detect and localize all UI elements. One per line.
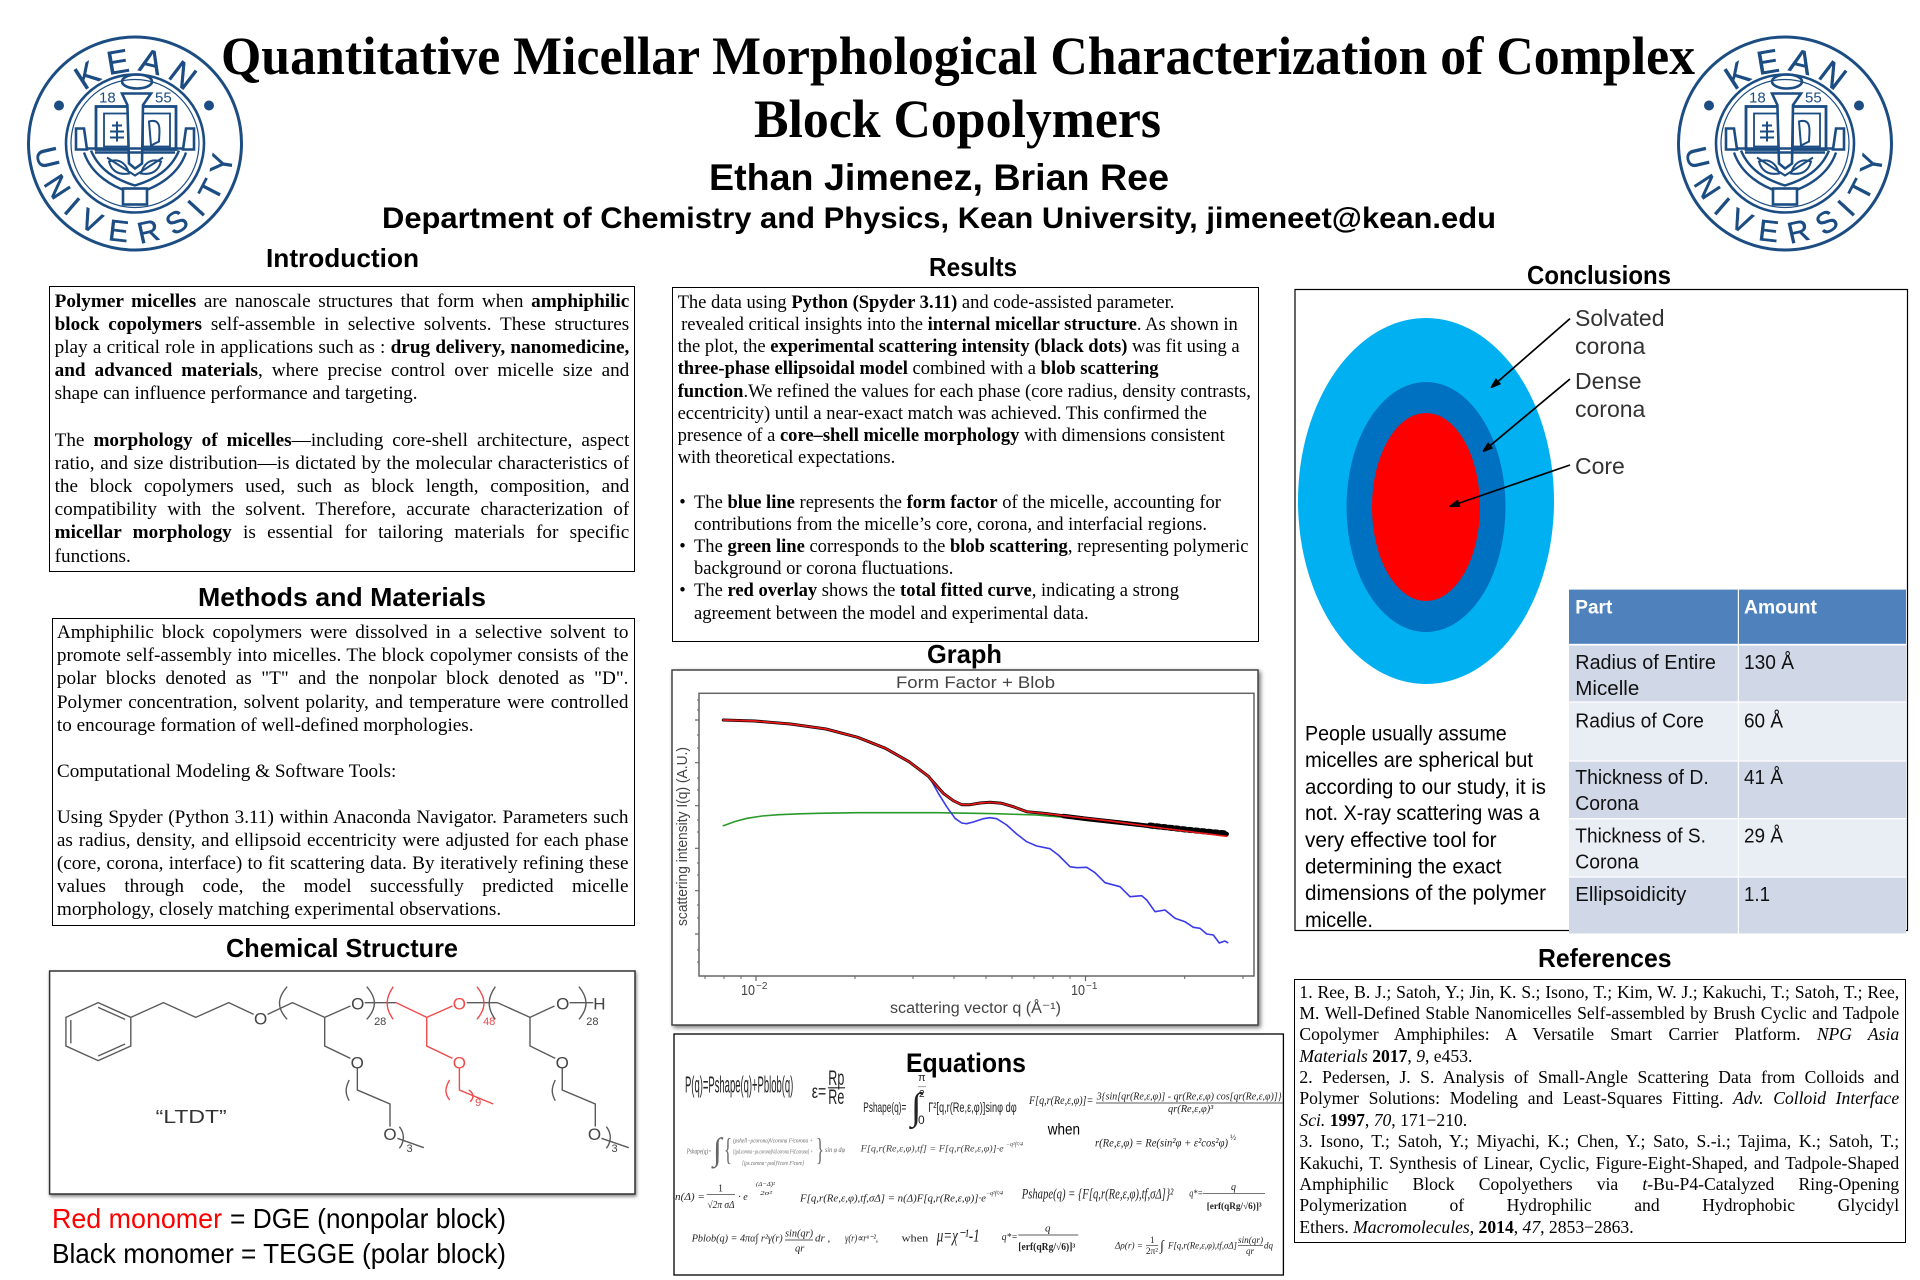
heading: Graph: Graph bbox=[927, 639, 1002, 669]
panel: methods and materials text: values through code, the model successfully predicted micelle bbox=[57, 876, 628, 897]
panel: references text: Polymer Solutions: Modeling and Least-Squares Fitting. Adv. Colloid Interface bbox=[1299, 1088, 1899, 1108]
equation row 3: 1 bbox=[718, 1184, 723, 1195]
panel: methods and materials text: as radius, density, and ellipsoid eccentricity were adjusted for each phase bbox=[57, 830, 628, 851]
labels: atoms and subscripts: O bbox=[556, 994, 569, 1014]
labels: micelle regions: corona bbox=[1575, 333, 1646, 359]
panel: chemical structure bbox=[50, 971, 635, 1194]
labels: atoms and subscripts: 28 bbox=[586, 1016, 599, 1028]
table: micelle dimensions: Ellipsoidicity bbox=[1575, 884, 1686, 906]
labels: atoms and subscripts: 28 bbox=[374, 1016, 386, 1028]
equation row 2: [(ρs.corona−ρsol)Vcore F²core] bbox=[742, 1160, 804, 1167]
labels: atoms and subscripts: O bbox=[588, 1125, 601, 1144]
equation row 2: [(ρd.corona−ρs.corona)Vd.corona F²d.corona] + bbox=[733, 1148, 813, 1155]
equation row 2: } bbox=[816, 1131, 824, 1167]
equation row 3: −q²f²/4 bbox=[986, 1190, 1003, 1197]
panel: results text: agreement between the model and experimental data. bbox=[694, 603, 1089, 624]
panel: results text: eccentricity) until a near-exact match was achieved. This confirmed the bbox=[678, 403, 1207, 424]
equation row 4: Δρ(r) = bbox=[1114, 1240, 1143, 1250]
panel: references text: 1. Ree, B. J.; Satoh, Y.; Jin, K. S.; Isono, T.; Kim, W. J.; Kakuchi, T.; Satoh, T.; Ree, bbox=[1299, 982, 1899, 1002]
panel: introduction text: block copolymers self-assemble in selective solvents. These structures bbox=[55, 314, 629, 335]
equation row 3: √2π σΔ bbox=[708, 1200, 735, 1211]
equation row 1: Re bbox=[828, 1086, 844, 1109]
panel: methods and materials text: promote self-assembly into micelles. The block copolymer consists of the bbox=[57, 645, 628, 666]
equation row 1: Pshape(q)= bbox=[863, 1099, 906, 1115]
panel: equations bbox=[674, 1034, 1283, 1275]
diagram: polymer skeleton bbox=[66, 987, 629, 1148]
labels: atoms and subscripts: O bbox=[453, 1054, 466, 1072]
axis labels: −2 bbox=[756, 981, 768, 992]
labels: atoms and subscripts: O bbox=[351, 994, 364, 1014]
equation row 1: when bbox=[1047, 1121, 1080, 1138]
equation row 2 continued: F[q,r(Re,ε,φ),tf] = F[q,r(Re,ε,φ)]·e bbox=[860, 1144, 1004, 1154]
text: conclusion paragraph: dimensions of the polymer bbox=[1305, 882, 1546, 905]
authors: Ethan Jimenez, Brian Ree bbox=[709, 157, 1169, 198]
legend: monomer colours: = DGE (nonpolar block) bbox=[230, 1203, 506, 1234]
panel: introduction text: ratio, and size distribution—is dictated by the molecular characteristics of bbox=[55, 453, 629, 474]
panel: methods and materials text: Amphiphilic block copolymers were dissolved in a selective solvent to bbox=[57, 622, 628, 643]
panel: references text: Amphiphilic Block Copolyethers via t-Bu-P4-Catalyzed Ring-Opening bbox=[1299, 1174, 1899, 1194]
axis labels bbox=[674, 747, 1098, 1017]
heading: Conclusions: Conclusions bbox=[1527, 260, 1671, 290]
equation row 2 continued bbox=[860, 1141, 1023, 1154]
legend: monomer colours bbox=[52, 1203, 506, 1269]
heading: Methods and Materials: Methods and Materials bbox=[198, 582, 486, 612]
legend: monomer colours: Black monomer = TEGGE (polar block) bbox=[52, 1238, 506, 1269]
table: micelle dimensions: 60 Å bbox=[1744, 710, 1784, 732]
labels: micelle regions: Solvated bbox=[1575, 305, 1665, 331]
panel: methods and materials text: to encourage formation of well-defined morphologies. bbox=[57, 715, 474, 736]
labels: micelle regions bbox=[1575, 305, 1665, 479]
equation row 1: r(Re,ε,φ) = Re(sin²φ + ε²cos²φ) bbox=[1095, 1136, 1228, 1150]
panel: introduction text: the block copolymers used, such as block length, composition, and bbox=[55, 476, 629, 497]
panel: references text: Materials 2017, 9, e453. bbox=[1299, 1046, 1472, 1066]
equation row 1: ε= bbox=[812, 1082, 826, 1103]
equation row 3: q*= bbox=[1189, 1189, 1203, 1200]
equation row 4: Pblob(q) = 4πα∫ r²γ(r) bbox=[691, 1233, 783, 1245]
panel: introduction text: and advanced materials, where precise control over micelle size and bbox=[55, 360, 629, 381]
equation row 1: Rp bbox=[828, 1067, 844, 1090]
logo: Kean University seal right: 55 bbox=[1805, 90, 1822, 106]
panel: results text: The blue line represents the form factor of the micelle, accounting for bbox=[694, 492, 1221, 513]
equation row 4: dr , bbox=[815, 1233, 831, 1245]
axis labels: scattering vector q (Å⁻¹) bbox=[890, 1000, 1061, 1017]
table: micelle dimensions: 1.1 bbox=[1744, 884, 1770, 906]
equation row 4: dq bbox=[1264, 1240, 1274, 1250]
heading: Results: Results bbox=[929, 252, 1017, 282]
panel: results text: the plot, the experimental scattering intensity (black dots) was fit using a bbox=[678, 336, 1240, 357]
equation row 3 bbox=[675, 1181, 1265, 1212]
equation row 2: ∫ bbox=[711, 1131, 724, 1169]
panel: introduction text: The morphology of micelles—including core-shell architecture, aspect bbox=[55, 430, 629, 451]
equation row 1: P(q)=Pshape(q)+Pblob(q) bbox=[685, 1071, 793, 1097]
panel: introduction text: functions. bbox=[55, 546, 131, 567]
labels: atoms and subscripts: O bbox=[453, 994, 466, 1014]
label: LTDT: “LTDT” bbox=[156, 1107, 227, 1127]
panel: methods and materials text: morphology, closely matching experimental observations. bbox=[57, 899, 501, 920]
panel: references text: Copolymer Amphiphiles: A Versatile Smart Carrier Platform. NPG Asia bbox=[1299, 1024, 1899, 1044]
logo: Kean University seal left: 18 bbox=[99, 90, 116, 106]
panel: methods and materials text: Computational Modeling & Software Tools: bbox=[57, 761, 396, 782]
labels: micelle regions: corona bbox=[1575, 396, 1646, 422]
equation row 4 bbox=[691, 1223, 1274, 1256]
panel: references text: Ethers. Macromolecules, 2014, 47, 2853−2863. bbox=[1299, 1217, 1634, 1237]
equation row 4: qr bbox=[1246, 1246, 1254, 1256]
equation row 4: F[q,r(Re,ε,φ),tf,σΔ] bbox=[1167, 1240, 1237, 1250]
table: micelle dimensions: Micelle bbox=[1575, 678, 1639, 700]
equation row 2: { bbox=[724, 1131, 732, 1167]
panel: references text: 2. Pedersen, J. S. Analysis of Small-Angle Scattering Data from Colloids and bbox=[1299, 1067, 1899, 1087]
equation row 4: q bbox=[1045, 1223, 1051, 1235]
labels: atoms and subscripts bbox=[254, 994, 618, 1155]
table: micelle dimensions: Radius of Entire bbox=[1575, 652, 1716, 674]
title bbox=[221, 26, 1695, 149]
logo: Kean University seal right: KEAN bbox=[1724, 48, 1848, 90]
equation row 3: Pshape(q) = {F[q,r(Re,ε,φ),tf,σΔ]}² bbox=[1021, 1186, 1174, 1202]
equation row 2 bbox=[686, 1131, 845, 1169]
panel: methods and materials text: Using Spyder (Python 3.11) within Anaconda Navigator. Parameters such bbox=[57, 807, 628, 828]
panel: results text: three-phase ellipsoidal model combined with a blob scattering bbox=[678, 358, 1159, 379]
panel: methods and materials text: Polymer concentration, solvent polarity, and temperature were controlled bbox=[57, 692, 628, 713]
table: micelle dimensions: Amount bbox=[1744, 596, 1817, 618]
text: conclusion paragraph: People usually assume bbox=[1305, 722, 1507, 746]
text: conclusion paragraph: micelle. bbox=[1305, 909, 1373, 932]
text: conclusion paragraph: micelles are spherical but bbox=[1305, 749, 1533, 772]
table: micelle dimensions: Part bbox=[1575, 596, 1613, 618]
equation row 4: qr bbox=[795, 1244, 805, 1255]
labels: micelle regions: Core bbox=[1575, 453, 1625, 479]
equation row 1: ½ bbox=[1230, 1133, 1236, 1142]
panel: conclusions bbox=[1295, 290, 1908, 934]
equation row 3: [erf(qRg/√6)]³ bbox=[1207, 1201, 1262, 1212]
text: conclusion paragraph bbox=[1305, 722, 1546, 932]
equation row 4: 2π² bbox=[1146, 1246, 1158, 1256]
equation row 4: γ(r)∝rᵘ⁻², bbox=[845, 1234, 878, 1245]
table: micelle dimensions: Corona bbox=[1575, 851, 1640, 873]
equation row 1 bbox=[685, 1067, 1283, 1150]
labels: atoms and subscripts: H bbox=[593, 994, 606, 1014]
equation row 3: q bbox=[1231, 1182, 1236, 1193]
panel: introduction text: play a critical role in applications such as : drug delivery, nanomedicine, bbox=[55, 337, 629, 358]
equation row 2: sin φ dφ bbox=[825, 1146, 845, 1154]
equation row 4: sin(qr) bbox=[1238, 1235, 1263, 1245]
panel: introduction text bbox=[49, 286, 635, 572]
panel: methods and materials text: polar blocks denoted as "T" and the nonpolar block denoted as "D". bbox=[57, 668, 628, 689]
panel: results text: function.We refined the values for each phase (core radius, density contrasts, bbox=[678, 381, 1251, 402]
panel: results text: background or corona fluctuations. bbox=[694, 558, 953, 579]
panel: results text: The red overlay shows the total fitted curve, indicating a strong bbox=[694, 580, 1179, 601]
arrow: dense corona bbox=[1484, 379, 1570, 451]
title: Block Copolymers bbox=[754, 89, 1161, 149]
panel: results text: revealed critical insights into the internal micellar structure. As shown in bbox=[681, 314, 1238, 335]
table: micelle dimensions: Thickness of D. bbox=[1575, 767, 1709, 789]
panel: references text: Sci. 1997, 70, 171−210. bbox=[1299, 1110, 1467, 1130]
logo: Kean University seal right bbox=[1677, 36, 1893, 252]
equation row 1: π bbox=[918, 1072, 926, 1084]
panel: results text: presence of a core–shell micelle morphology with dimensions consistent bbox=[678, 425, 1225, 446]
equation row 1: qr(Re,ε,φ)³ bbox=[1168, 1104, 1214, 1115]
labels: atoms and subscripts: O bbox=[383, 1125, 397, 1144]
panel: results text: • bbox=[679, 536, 686, 557]
panel: results text: The data using Python (Spyder 3.11) and code-assisted parameter. bbox=[678, 292, 1174, 313]
equation row 3: (Δ−Δ̄)² bbox=[756, 1181, 776, 1188]
labels: atoms and subscripts: O bbox=[351, 1054, 364, 1072]
labels: atoms and subscripts: O bbox=[254, 1010, 267, 1028]
equation row 4: when bbox=[902, 1233, 929, 1245]
panel: results text: contributions from the micelle’s core, corona, and interfacial regions. bbox=[694, 514, 1207, 535]
logo: Kean University seal left: 55 bbox=[155, 90, 172, 106]
table: micelle dimensions: 29 Å bbox=[1744, 824, 1784, 847]
panel: results text: • bbox=[679, 492, 686, 513]
table: micelle dimensions: Thickness of S. bbox=[1575, 825, 1706, 847]
panel: references text: 3. Isono, T.; Satoh, Y.; Miyachi, K.; Chen, Y.; Sato, S.-i.; Tajima, K.; Satoh, T.; bbox=[1299, 1131, 1899, 1151]
equation row 1: F[q,r(Re,ε,φ)]= bbox=[1028, 1095, 1093, 1107]
table: micelle dimensions: Radius of Core bbox=[1575, 710, 1704, 732]
axis labels: 10 bbox=[741, 982, 755, 999]
logo: Kean University seal left bbox=[27, 36, 243, 252]
equation row 1: 2 bbox=[919, 1089, 925, 1100]
equation row 3: n(Δ) = bbox=[675, 1192, 705, 1203]
logo: Kean University seal left: KEAN bbox=[74, 48, 198, 90]
axis labels: −1 bbox=[1086, 981, 1098, 992]
equation row 1: 3{sin[qr(Re,ε,φ)] - qr(Re,ε,φ) cos[qr(Re,ε,φ)]} bbox=[1096, 1090, 1282, 1102]
labels: atoms and subscripts: O bbox=[556, 1054, 569, 1072]
equation row 4: 1 bbox=[1150, 1235, 1154, 1245]
equation row 4: μ=χ⁻¹-1 bbox=[936, 1226, 980, 1246]
curves: green blob, blue form factor, black data, red fit bbox=[723, 720, 1228, 943]
text: conclusion paragraph: very effective tool for bbox=[1305, 829, 1497, 852]
equation row 4: ∫ bbox=[1159, 1239, 1165, 1254]
equations heading: Equations bbox=[906, 1048, 1026, 1078]
panel: results text bbox=[672, 287, 1259, 642]
axis labels: scattering intensity I(q) (A.U.) bbox=[674, 747, 691, 926]
labels: atoms and subscripts: 3 bbox=[611, 1143, 618, 1155]
table: micelle dimensions: 41 Å bbox=[1744, 766, 1784, 789]
equation row 2: (ρshell−ρcorona)Vcorona F²corona + bbox=[733, 1137, 813, 1144]
panel: introduction text: compatibility with the solvent. Therefore, accurate characterization of bbox=[55, 499, 629, 520]
equation row 3: · e bbox=[738, 1192, 748, 1203]
table: micelle dimensions: 130 Å bbox=[1744, 651, 1795, 674]
table: micelle dimensions: Corona bbox=[1575, 793, 1640, 815]
logo: Kean University seal right: UNIVERSITY bbox=[1686, 146, 1882, 244]
labels: atoms and subscripts: 3 bbox=[407, 1143, 413, 1155]
equation row 1: ∫ bbox=[909, 1086, 924, 1130]
panel: references text: M. Well-Defined Stable Nanomicelles Self-assembled by Brush Cyclic and Tadpole bbox=[1299, 1003, 1899, 1023]
text: conclusion paragraph: not. X-ray scattering was a bbox=[1305, 802, 1540, 825]
logo: Kean University seal right: 18 bbox=[1749, 90, 1766, 106]
heading: References: References bbox=[1538, 943, 1672, 973]
heading: Introduction: Introduction bbox=[266, 243, 419, 273]
labels: micelle regions: Dense bbox=[1575, 368, 1641, 394]
panel: introduction text: Polymer micelles are nanoscale structures that form when amphiphilic bbox=[55, 291, 629, 312]
arrow: core bbox=[1451, 465, 1570, 506]
panel: methods and materials text bbox=[52, 618, 635, 926]
equation row 1: Γ²[q,r(Re,ε,φ)]sinφ dφ bbox=[928, 1099, 1017, 1115]
panel: introduction text: micellar morphology is essential for tailoring materials for specific bbox=[55, 522, 629, 543]
plot frame and ticks bbox=[695, 693, 1254, 981]
panel: references text: Polymerization of Hydrophilic and Hydrophobic Glycidyl bbox=[1299, 1195, 1899, 1215]
panel: methods and materials text: (core, corona, interface) to fit scattering data. By iteratively refining these bbox=[57, 853, 628, 874]
equation row 3: F[q,r(Re,ε,φ),tf,σΔ] = n(Δ)F[q,r(Re,ε,φ)]·e bbox=[799, 1194, 986, 1205]
equation row 4: q*= bbox=[1002, 1231, 1018, 1243]
affiliation: Department of Chemistry and Physics, Kean University, jimeneet@kean.edu bbox=[382, 202, 1496, 235]
panel: references text: Kakuchi, T. Synthesis of Linear, Cyclic, Figure-Eight-Shaped, and Tadpole-Shaped bbox=[1299, 1153, 1899, 1173]
table: micelle dimensions bbox=[1569, 590, 1906, 934]
text: conclusion paragraph: determining the exact bbox=[1305, 856, 1502, 879]
labels: atoms and subscripts: 48 bbox=[483, 1016, 495, 1028]
equation row 4: [erf(qRg/√6)]³ bbox=[1018, 1242, 1075, 1253]
equation row 1: 0 bbox=[918, 1113, 925, 1127]
title: Quantitative Micellar Morphological Characterization of Complex bbox=[221, 26, 1695, 86]
panel: graph bbox=[672, 670, 1258, 1025]
equation row 3: 2σ² bbox=[760, 1190, 773, 1197]
equation row 2 continued: −q²f²/4 bbox=[1006, 1141, 1023, 1148]
axis labels: 10 bbox=[1071, 982, 1085, 999]
diagram: ellipsoidal micelle bbox=[1298, 318, 1554, 684]
arrow: solvated corona bbox=[1492, 319, 1570, 387]
text: conclusion paragraph: according to our study, it is bbox=[1305, 776, 1546, 799]
panel: references text bbox=[1294, 979, 1906, 1243]
chart title: Form Factor + Blob bbox=[896, 674, 1055, 692]
panel: results text: The green line corresponds to the blob scattering, representing polymeric bbox=[694, 536, 1248, 557]
panel: introduction text: shape can influence performance and targeting. bbox=[55, 383, 418, 404]
labels: atoms and subscripts: 9 bbox=[475, 1097, 481, 1109]
logo: Kean University seal left: UNIVERSITY bbox=[36, 146, 232, 244]
heading: Chemical Structure: Chemical Structure bbox=[226, 933, 458, 963]
panel: results text: with theoretical expectations. bbox=[678, 447, 895, 468]
equation row 2: Pshape(q)= bbox=[686, 1147, 712, 1155]
legend: monomer colours: Red monomer bbox=[52, 1203, 222, 1234]
panel: results text: • bbox=[679, 580, 686, 601]
equation row 4: sin(qr) bbox=[785, 1229, 813, 1240]
